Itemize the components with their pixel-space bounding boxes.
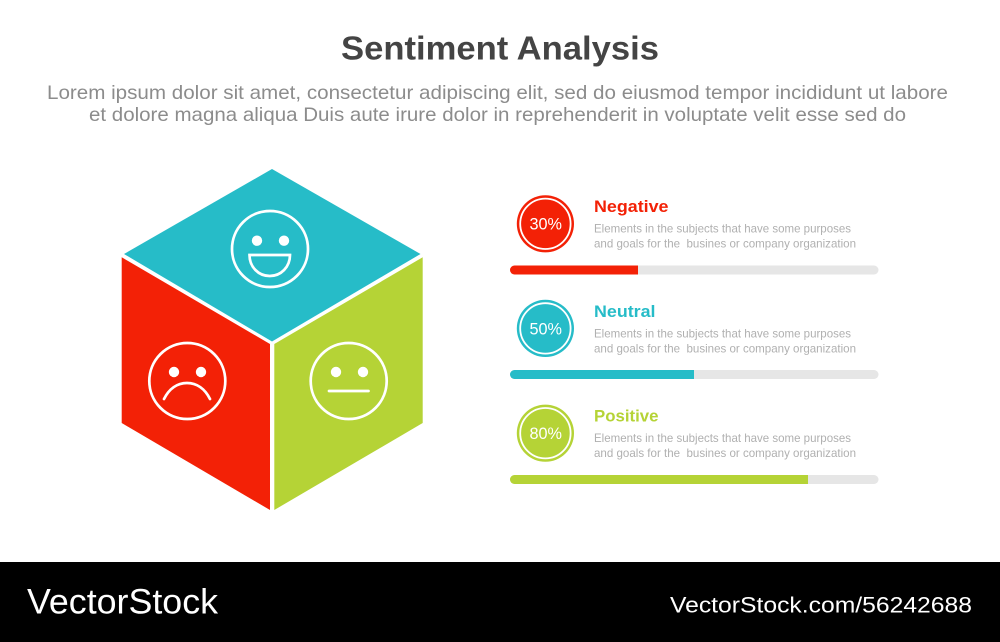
badge: 80%: 80%: [530, 425, 562, 443]
watermark URL: VectorStock.com/56242688: [670, 592, 972, 618]
watermark logo text: VectorStock: [27, 581, 218, 621]
heading: Negative: Negative: [594, 197, 668, 216]
subtitle text: et dolore magna aliqua Duis aute irure dolor in reprehenderit in voluptate velit esse sed do: [89, 104, 906, 126]
badge: 50%: [517, 300, 574, 357]
cube right face: neutral: [274, 257, 423, 510]
description: and goals for the busines or company organization: [594, 446, 856, 460]
progress bar 30%: [510, 266, 878, 274]
item: positive: [510, 405, 878, 484]
description: [594, 222, 856, 250]
heading: Neutral: Neutral: [594, 302, 656, 321]
subtitle text: [47, 82, 948, 126]
item: neutral: [510, 300, 878, 379]
cube left face: negative: [122, 257, 270, 510]
title: Sentiment Analysis: [341, 30, 659, 68]
progress bar 80%: [510, 475, 878, 484]
badge: 50%: 50%: [530, 320, 562, 338]
cube diagram: [122, 169, 423, 510]
cube top face: positive: [124, 169, 420, 342]
item: negative: [510, 195, 878, 274]
subtitle text: Lorem ipsum dolor sit amet, consectetur adipiscing elit, sed do eiusmod tempor incididunt ut labore: [47, 82, 948, 104]
description: [594, 326, 856, 355]
badge: 80%: [517, 405, 574, 462]
icon: neutral face: [311, 343, 387, 419]
description: Elements in the subjects that have some purposes: [594, 431, 851, 445]
description: Elements in the subjects that have some purposes: [594, 326, 851, 340]
description: Elements in the subjects that have some purposes: [594, 222, 851, 236]
description: and goals for the busines or company organization: [594, 341, 856, 355]
badge: 30%: 30%: [530, 216, 562, 234]
icon: sad face: [149, 343, 225, 419]
badge: 30%: [517, 195, 574, 252]
heading: Positive: Positive: [594, 407, 658, 426]
description: and goals for the busines or company organization: [594, 236, 856, 250]
progress bar 50%: [510, 370, 878, 379]
description: [594, 431, 856, 460]
watermark band: [0, 562, 1000, 642]
icon: happy face: [232, 211, 308, 287]
